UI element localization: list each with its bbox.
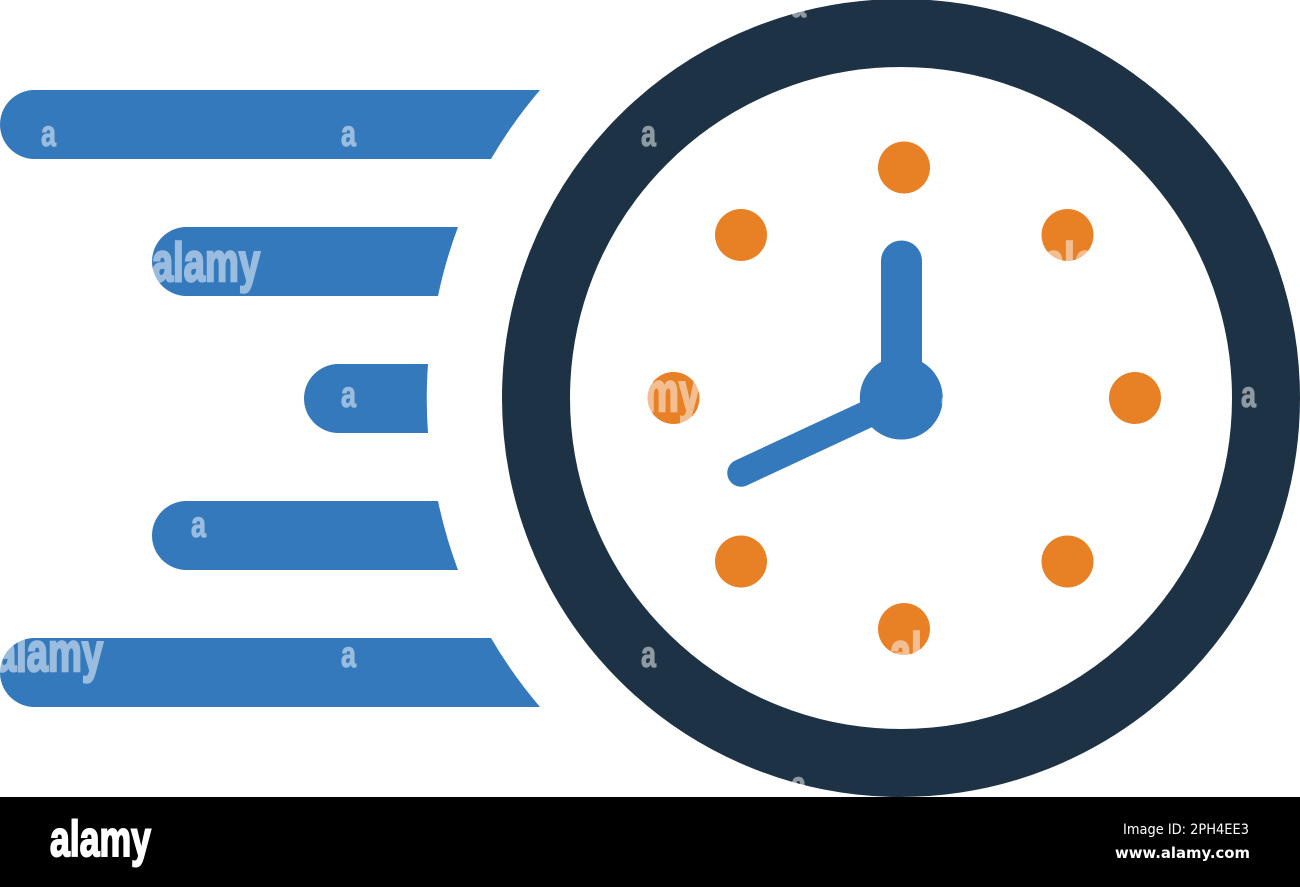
clock hands xyxy=(741,261,943,473)
footer bar xyxy=(0,797,1300,887)
watermark small a's: a xyxy=(41,113,56,154)
speed line 2 xyxy=(152,227,458,296)
watermark small a's: a xyxy=(191,504,206,545)
hour hand xyxy=(741,408,880,473)
watermark alamy rows: alamy xyxy=(890,621,998,683)
website: www.alamy.com xyxy=(1115,844,1250,862)
watermark small a's: a xyxy=(341,374,356,415)
speed line 5 xyxy=(0,638,540,707)
hour dots xyxy=(648,142,1161,655)
dot 7 xyxy=(715,536,767,588)
speed line 1 xyxy=(0,90,540,159)
dot 12 xyxy=(878,142,930,194)
dot 11 xyxy=(715,209,767,261)
clock ring xyxy=(536,33,1266,763)
dot 9 xyxy=(648,372,700,424)
watermark small a's: a xyxy=(641,113,656,154)
watermark alamy rows: alamy xyxy=(1043,231,1151,293)
image id: Image ID: 2PH4EE3 xyxy=(1123,822,1249,838)
dot 3 xyxy=(1109,372,1161,424)
minute hand xyxy=(881,261,922,400)
watermark small a's: a xyxy=(791,764,806,805)
speed line 4 xyxy=(152,501,458,570)
watermark small a's: a xyxy=(641,634,656,675)
watermark alamy rows: alamy xyxy=(592,361,700,423)
center hub xyxy=(860,356,943,440)
dot 5 xyxy=(1042,536,1094,588)
speed lines xyxy=(0,90,540,707)
watermark alamy rows: alamy xyxy=(152,231,260,293)
alamy logo: alamy xyxy=(50,811,151,867)
watermark small a's: a xyxy=(941,374,956,415)
watermark small a's: a xyxy=(1241,374,1256,415)
watermark alamy rows xyxy=(0,231,1151,683)
dot 1 xyxy=(1042,209,1094,261)
watermark small a's: a xyxy=(341,634,356,675)
dot 6 xyxy=(878,603,930,655)
speed line 3 xyxy=(304,364,428,433)
watermark small a's: a xyxy=(341,113,356,154)
